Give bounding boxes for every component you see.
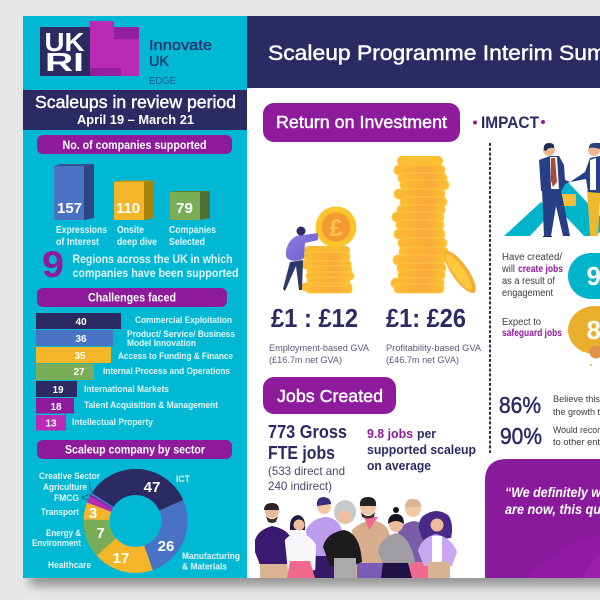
logo: UKRI: UK	[44, 27, 85, 57]
bar chart: challenges faced: 13	[45, 418, 57, 430]
heading pill: No. of companies supported: No. of companies supported	[62, 140, 206, 152]
bar labels: Companies	[169, 225, 216, 236]
header: title band: Scaleup Programme Interim Sum	[268, 42, 600, 65]
logo text: Innovate UK EDGE	[149, 38, 212, 87]
illustration: handshake	[504, 143, 600, 237]
challenge labels: Model Innovation	[127, 338, 196, 349]
challenge labels: Access to Funding & Finance	[118, 351, 233, 362]
person: left businessman	[539, 143, 570, 237]
header: title band	[247, 16, 600, 88]
bar labels: deep dive	[117, 237, 157, 248]
stat: create jobs: as a result of	[502, 276, 555, 287]
bar chart: challenges faced: 35	[74, 351, 86, 362]
stat: 86 percent	[499, 392, 600, 418]
stat: 90 percent: to other ent	[553, 437, 600, 448]
stat: profitability-based ROI	[386, 303, 482, 366]
stat: 90 percent: 90%	[500, 423, 542, 449]
person: lilac jacket	[418, 511, 457, 578]
donut values: 47	[144, 479, 160, 496]
bar labels: of Interest	[56, 237, 100, 248]
person: lavender tee	[306, 497, 342, 578]
stat: profitability-based ROI: (£46.7m net GVA)	[386, 355, 459, 366]
donut labels: Environment	[32, 538, 82, 549]
donut labels: Transport	[41, 507, 80, 518]
bar labels: Onsite	[117, 225, 144, 236]
donut labels: & Materials	[182, 562, 227, 572]
person: right businessman	[570, 143, 600, 236]
donut labels: Energy &	[46, 528, 81, 539]
logo text: Innovate UK EDGE: UK	[149, 54, 169, 70]
stat: employment-based ROI: (£16.7m net GVA)	[269, 355, 342, 366]
donut values	[89, 479, 174, 567]
stat: employment-based ROI: Employment-based GVA	[269, 343, 370, 354]
illustration: group of people	[255, 497, 457, 578]
stat: 9 regions: 9	[42, 244, 64, 285]
bar chart: challenges faced: 40	[75, 317, 87, 328]
stat: 9.8 jobs per scaleup: on average	[367, 459, 431, 473]
illustration: tall coin stack	[391, 156, 481, 297]
donut values: 3	[89, 505, 97, 522]
bar labels: Expressions	[56, 225, 107, 236]
person: bald purple shirt	[398, 499, 430, 578]
panel: quote	[485, 459, 600, 578]
stat: 773 gross jobs: 240 indirect)	[268, 479, 332, 493]
bar chart: challenges faced: 36	[75, 334, 87, 345]
person: grey top, bun	[378, 507, 415, 578]
challenge labels: Internal Process and Operations	[103, 366, 230, 377]
stat: safeguard jobs	[502, 306, 600, 366]
stat: 773 gross jobs: 773 Gross	[268, 422, 347, 442]
stat: 773 gross jobs	[268, 422, 347, 493]
heading pill: Return on Investment: Return on Investment	[276, 112, 447, 132]
donut labels: Creative Sector	[39, 471, 100, 482]
bar chart: challenges faced: 18	[50, 402, 62, 413]
bar: expressions of interest: 157	[57, 200, 82, 217]
donut labels	[32, 471, 240, 572]
heading band: Scaleups in review period: April 19 – March 21	[77, 113, 194, 127]
stat: 9.8 jobs per scaleup: per	[417, 427, 436, 441]
logo text: Innovate UK EDGE: Innovate	[149, 38, 212, 54]
person: grey hair, black top	[323, 500, 362, 578]
stat: employment-based ROI: £1 : £12	[271, 303, 358, 333]
donut chart: sector	[96, 482, 174, 560]
stat: 9.8 jobs per scaleup	[367, 427, 476, 473]
challenge labels: Commercial Exploitation	[135, 315, 232, 326]
challenge labels: International Markets	[84, 384, 169, 395]
donut values: 17	[113, 550, 129, 567]
heading pill: Jobs Created	[263, 377, 396, 414]
stat: 9 regions: companies have been supported	[72, 268, 238, 280]
bar chart: challenges faced	[36, 313, 121, 430]
stat: 773 gross jobs: FTE jobs	[268, 443, 335, 463]
person: tan sweater	[352, 497, 390, 578]
stat: 9 regions: Regions across the UK in which	[72, 254, 232, 266]
donut labels: ICT	[176, 474, 190, 485]
stat: profitability-based ROI: £1: £26	[386, 303, 466, 333]
stat: employment-based ROI	[269, 303, 370, 366]
illustration: small coin stack with person	[283, 206, 356, 293]
donut labels: Healthcare	[48, 560, 91, 571]
logo: UKRI	[40, 21, 139, 77]
heading pill: Scaleup company by sector: Scaleup company by sector	[65, 444, 205, 456]
bar labels: Selected	[169, 237, 205, 248]
stat: create jobs: create jobs	[518, 264, 563, 275]
person: dark sweater	[255, 503, 292, 578]
heading pill: Return on Investment	[263, 103, 460, 142]
donut values: 7	[96, 525, 105, 542]
stat: 90 percent	[500, 423, 600, 449]
person pushing coin	[283, 226, 318, 291]
stat: safeguard jobs: Expect to	[502, 317, 541, 328]
heading pill: Jobs Created: Jobs Created	[277, 386, 383, 406]
heading pill: Challenges faced	[37, 288, 227, 307]
heading band: Scaleups in review period	[23, 90, 247, 130]
challenge labels: Talent Acquisition & Management	[84, 400, 219, 411]
bar: companies selected	[170, 191, 210, 220]
donut labels: Agriculture	[43, 482, 87, 493]
stat: 9.8 jobs per scaleup: 9.8 jobs	[367, 427, 413, 441]
heading: IMPACT: IMPACT	[481, 114, 539, 132]
stat: 9 regions	[42, 244, 238, 285]
panel: left sidebar	[23, 16, 247, 578]
bar: expressions of interest	[54, 164, 94, 220]
heading pill: No. of companies supported	[37, 135, 232, 154]
bar: companies selected: 79	[176, 200, 193, 217]
challenge labels	[72, 315, 235, 428]
person: white top	[285, 515, 316, 578]
stat: 773 gross jobs: (533 direct and	[268, 464, 345, 478]
leaning coin	[439, 247, 481, 297]
bar labels	[56, 225, 216, 248]
stat: create jobs: will	[501, 264, 515, 275]
stat: safeguard jobs: safeguard jobs	[502, 328, 562, 339]
donut labels: FMCG	[54, 493, 79, 504]
stat: create jobs: Have created/	[502, 252, 562, 263]
3D bar chart: companies	[54, 164, 210, 220]
bar: onsite deep dive	[114, 180, 154, 220]
donut labels: Manufacturing	[182, 551, 240, 562]
big pound coin: £	[329, 215, 343, 242]
logo: UKRI: RI	[45, 47, 84, 77]
heading pill: Challenges faced: Challenges faced	[88, 292, 176, 304]
challenge labels: Intellectual Property	[72, 417, 154, 428]
bar chart: challenges faced: 19	[52, 385, 64, 396]
stat: 9.8 jobs per scaleup: supported scaleup	[367, 443, 476, 457]
donut values: 26	[158, 538, 174, 555]
heading band: Scaleups in review period: Scaleups in review period	[35, 92, 236, 112]
heading pill: Scaleup company by sector	[37, 440, 232, 459]
stat: create jobs: engagement	[502, 288, 553, 299]
bar: onsite deep dive: 110	[116, 200, 140, 217]
stat: profitability-based ROI: Profitability-based GVA	[386, 343, 482, 354]
bar chart: challenges faced: 27	[73, 367, 85, 378]
stat: 86 percent: 86%	[499, 392, 541, 418]
stat: create jobs	[501, 252, 600, 299]
logo text: Innovate UK EDGE: EDGE	[149, 76, 176, 87]
challenge labels: Product/ Service/ Business	[127, 329, 235, 340]
